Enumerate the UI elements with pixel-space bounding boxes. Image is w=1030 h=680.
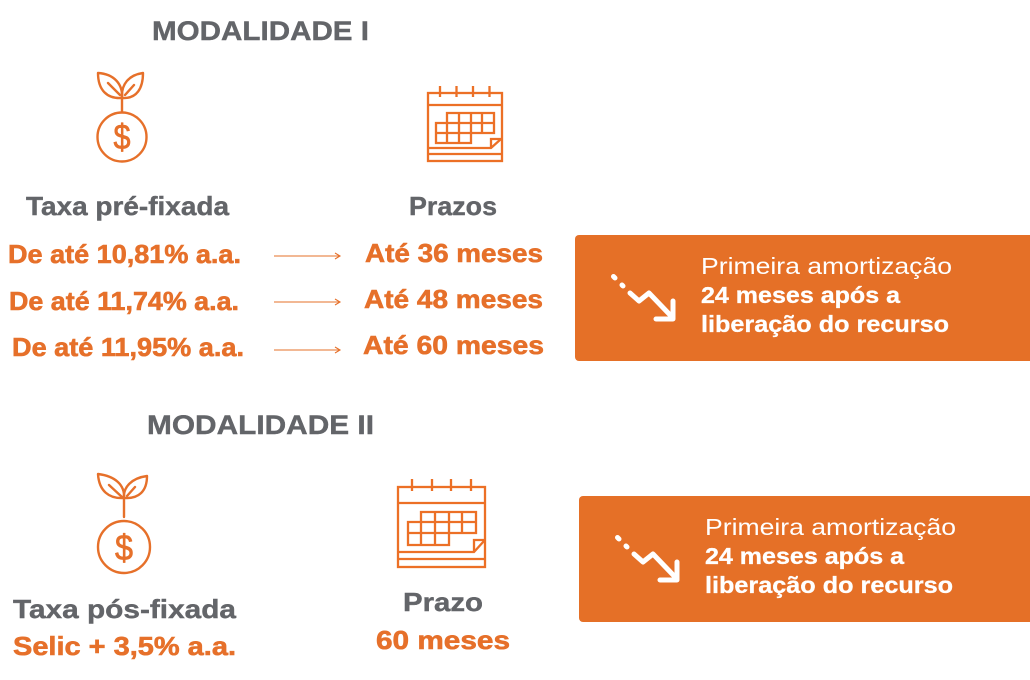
callout: amortization I: [575, 235, 1030, 361]
heading: Modalidade II: MODALIDADE II: [147, 410, 374, 440]
callout: amortization I: liberação do recurso: [701, 311, 949, 337]
callout: amortization II: [579, 496, 1030, 622]
rate row 2: De até 11,74% a.a.: [9, 286, 239, 316]
rate row 1: Até 36 meses: [365, 238, 543, 268]
icon: money plant I: $: [114, 118, 130, 157]
arrow 2: [274, 299, 340, 305]
icon: money plant II: $: [115, 527, 133, 568]
rate row 3: Até 60 meses: [363, 330, 544, 360]
callout: amortization II: Primeira amortização: [705, 514, 956, 540]
heading: Taxa pré-fixada: Taxa pré-fixada: [26, 191, 230, 221]
value: Selic + 3,5% a.a.: Selic + 3,5% a.a.: [13, 631, 236, 661]
heading: Prazo: Prazo: [403, 587, 483, 617]
icon: calendar II: [398, 479, 485, 567]
rate row 3: De até 11,95% a.a.: [12, 332, 244, 362]
rate row 1: De até 10,81% a.a.: [8, 239, 241, 269]
arrow 1: [274, 253, 340, 259]
icon: falling trend I: [614, 276, 673, 319]
icon: money plant II: [98, 474, 150, 573]
rate row 2: [9, 284, 543, 316]
arrow 3: [274, 347, 340, 353]
rate row 3: [12, 330, 544, 362]
heading: Taxa pós-fixada: Taxa pós-fixada: [13, 594, 237, 624]
icon: falling trend II: [618, 538, 677, 580]
rate row 1: [8, 238, 543, 269]
value: 60 meses: 60 meses: [376, 625, 510, 655]
callout: amortization I: 24 meses após a: [701, 282, 900, 308]
heading: Prazos: Prazos: [409, 191, 497, 221]
callout: amortization I: Primeira amortização: [701, 253, 952, 279]
icon: money plant I: [98, 73, 146, 162]
rate row 2: Até 48 meses: [364, 284, 543, 314]
icon: calendar I: [428, 86, 502, 161]
heading: Modalidade I: MODALIDADE I: [152, 16, 369, 46]
callout: amortization II: liberação do recurso: [705, 572, 953, 598]
callout: amortization II: 24 meses após a: [705, 543, 904, 569]
